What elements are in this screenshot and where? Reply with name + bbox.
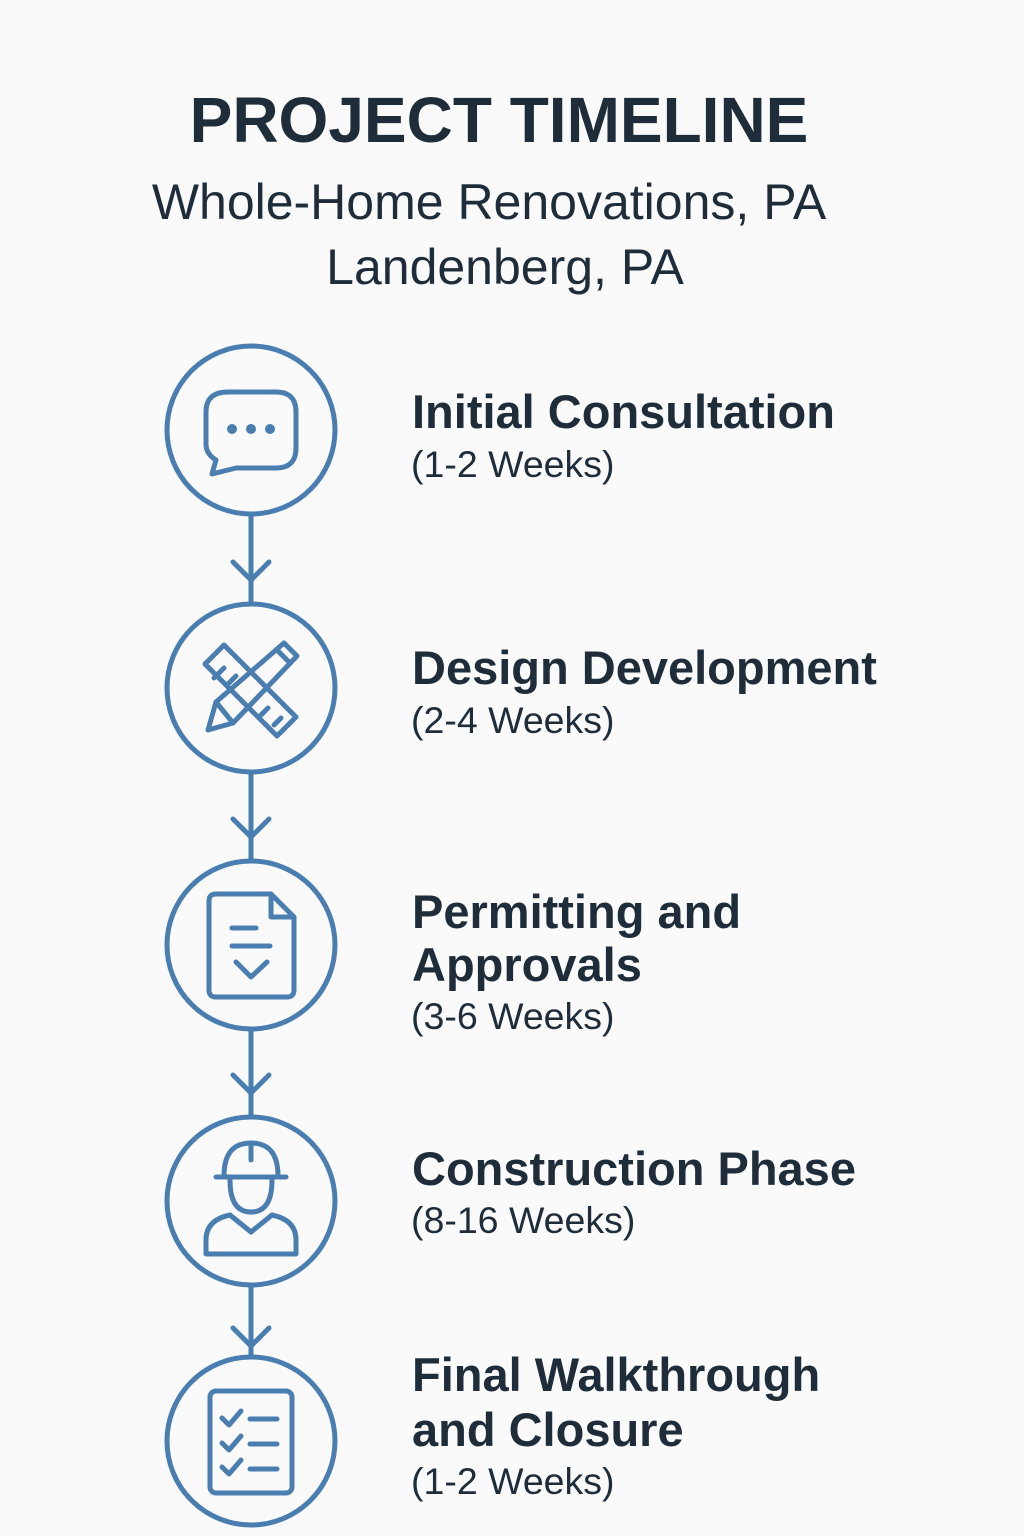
subtitle: Landenberg, PA — [326, 239, 684, 295]
step 3: permitting and approvals: Permitting and — [412, 885, 741, 938]
icon: worker with hard hat — [167, 1117, 335, 1285]
step 4: construction phase: (8-16 Weeks) — [411, 1199, 635, 1241]
step 2: design development — [167, 604, 877, 772]
title: PROJECT TIMELINE — [190, 84, 808, 156]
subtitle: Whole-Home Renovations, PA — [152, 174, 827, 230]
icon: chat bubble — [167, 346, 335, 514]
step 3: permitting and approvals: (3-6 Weeks) — [411, 995, 615, 1037]
step 1: initial consultation: (1-2 Weeks) — [411, 443, 615, 485]
step 3: permitting and approvals — [167, 861, 741, 1037]
step 4: construction phase — [167, 1117, 856, 1285]
subtitle — [152, 174, 827, 295]
icon: checklist — [167, 1357, 335, 1525]
step 2: design development: (2-4 Weeks) — [411, 699, 615, 741]
icon: document check — [167, 861, 335, 1029]
step 5: final walkthrough: (1-2 Weeks) — [411, 1460, 615, 1502]
step 1: initial consultation — [167, 346, 835, 514]
step 4: construction phase: Construction Phase — [412, 1142, 856, 1195]
step 5: final walkthrough: Final Walkthrough — [412, 1348, 820, 1401]
timeline connectors and arrows — [233, 515, 269, 1356]
step 3: permitting and approvals: Approvals — [412, 938, 642, 991]
step 2: design development: Design Development — [412, 641, 877, 694]
step 5: final walkthrough: and Closure — [412, 1403, 684, 1456]
icon: pencil and ruler — [167, 604, 335, 772]
step 5: final walkthrough — [167, 1348, 820, 1525]
step 1: initial consultation: Initial Consultation — [412, 385, 835, 438]
